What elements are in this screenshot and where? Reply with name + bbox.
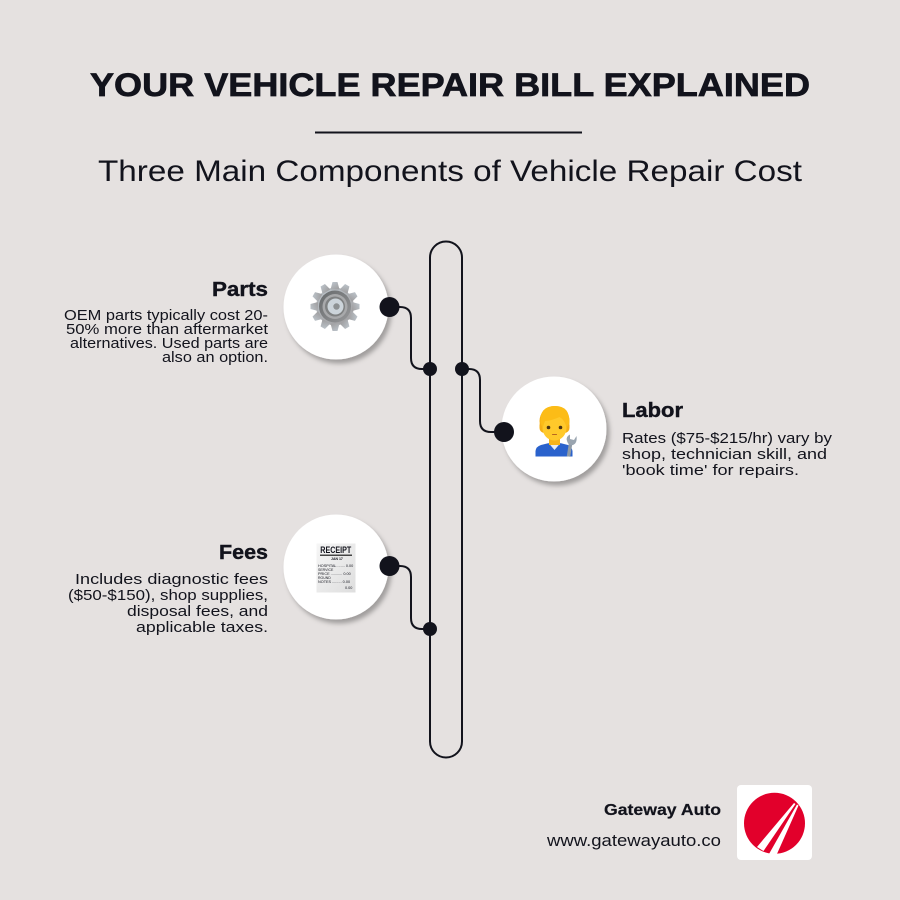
fees description: ($50-$150), shop supplies,	[68, 587, 268, 604]
parts icon circle	[284, 254, 388, 360]
parts description: 50% more than aftermarket	[66, 321, 269, 338]
icon: receipt: PRICE ........... 0.00	[318, 572, 351, 576]
labor connector	[462, 369, 504, 432]
parts description: OEM parts typically cost 20-	[64, 307, 268, 324]
icon: receipt: ROUND	[318, 576, 331, 580]
icon: receipt: SERVICE	[318, 568, 334, 572]
title: YOUR VEHICLE REPAIR BILL EXPLAINED	[90, 67, 810, 103]
fees description: Includes diagnostic fees	[75, 571, 268, 588]
icon: receipt: JAN 17	[331, 557, 343, 561]
footer: company name: Gateway Auto	[604, 802, 721, 819]
icon: receipt: RECEIPT	[320, 545, 352, 555]
labor connector end dot	[494, 422, 514, 442]
labor icon circle	[502, 376, 606, 482]
parts connector start dot	[380, 297, 400, 317]
footer: website: www.gatewayauto.co	[546, 832, 721, 850]
fees description: applicable taxes.	[136, 619, 268, 636]
icon: receipt: NOTES ......... 0.00	[318, 580, 350, 584]
parts description: also an option.	[162, 349, 268, 366]
logo	[737, 785, 812, 860]
fees connector end dot	[423, 622, 437, 636]
fees icon circle	[284, 514, 388, 620]
fees description	[68, 571, 268, 636]
icon: receipt	[316, 544, 356, 592]
panel: parts	[64, 254, 437, 376]
fees heading: Fees	[219, 542, 268, 564]
fees description: disposal fees, and	[127, 603, 268, 620]
labor connector start dot	[455, 362, 469, 376]
labor description: shop, technician skill, and	[622, 446, 827, 463]
labor heading: Labor	[622, 400, 683, 422]
subtitle: Three Main Components of Vehicle Repair Cost	[98, 155, 802, 188]
icon: mechanic	[536, 406, 577, 456]
labor description	[622, 430, 833, 479]
icon: gear	[310, 282, 360, 331]
parts description: alternatives. Used parts are	[70, 335, 268, 352]
icon: receipt: HOSPITAL ....... 0.00	[318, 564, 353, 568]
parts description	[64, 307, 269, 366]
central vertical track	[430, 242, 462, 758]
fees connector	[390, 566, 430, 629]
panel: labor	[455, 362, 833, 482]
parts heading: Parts	[212, 279, 268, 301]
labor description: Rates ($75-$215/hr) vary by	[622, 430, 833, 447]
labor description: 'book time' for repairs.	[622, 462, 799, 479]
fees connector start dot	[380, 556, 400, 576]
parts connector	[390, 307, 430, 369]
panel: fees	[68, 514, 437, 636]
icon: receipt: 0.00	[345, 586, 352, 590]
parts connector end dot	[423, 362, 437, 376]
